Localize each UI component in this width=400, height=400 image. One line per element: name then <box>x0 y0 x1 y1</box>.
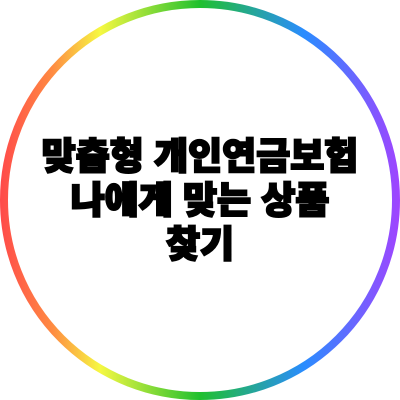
title line 1: 맞춤형 개인연금보험 <box>42 136 358 177</box>
title line 3: 찾기 <box>166 224 234 265</box>
title <box>42 136 358 265</box>
title line 2: 나에게 맞는 상품 <box>71 180 329 221</box>
